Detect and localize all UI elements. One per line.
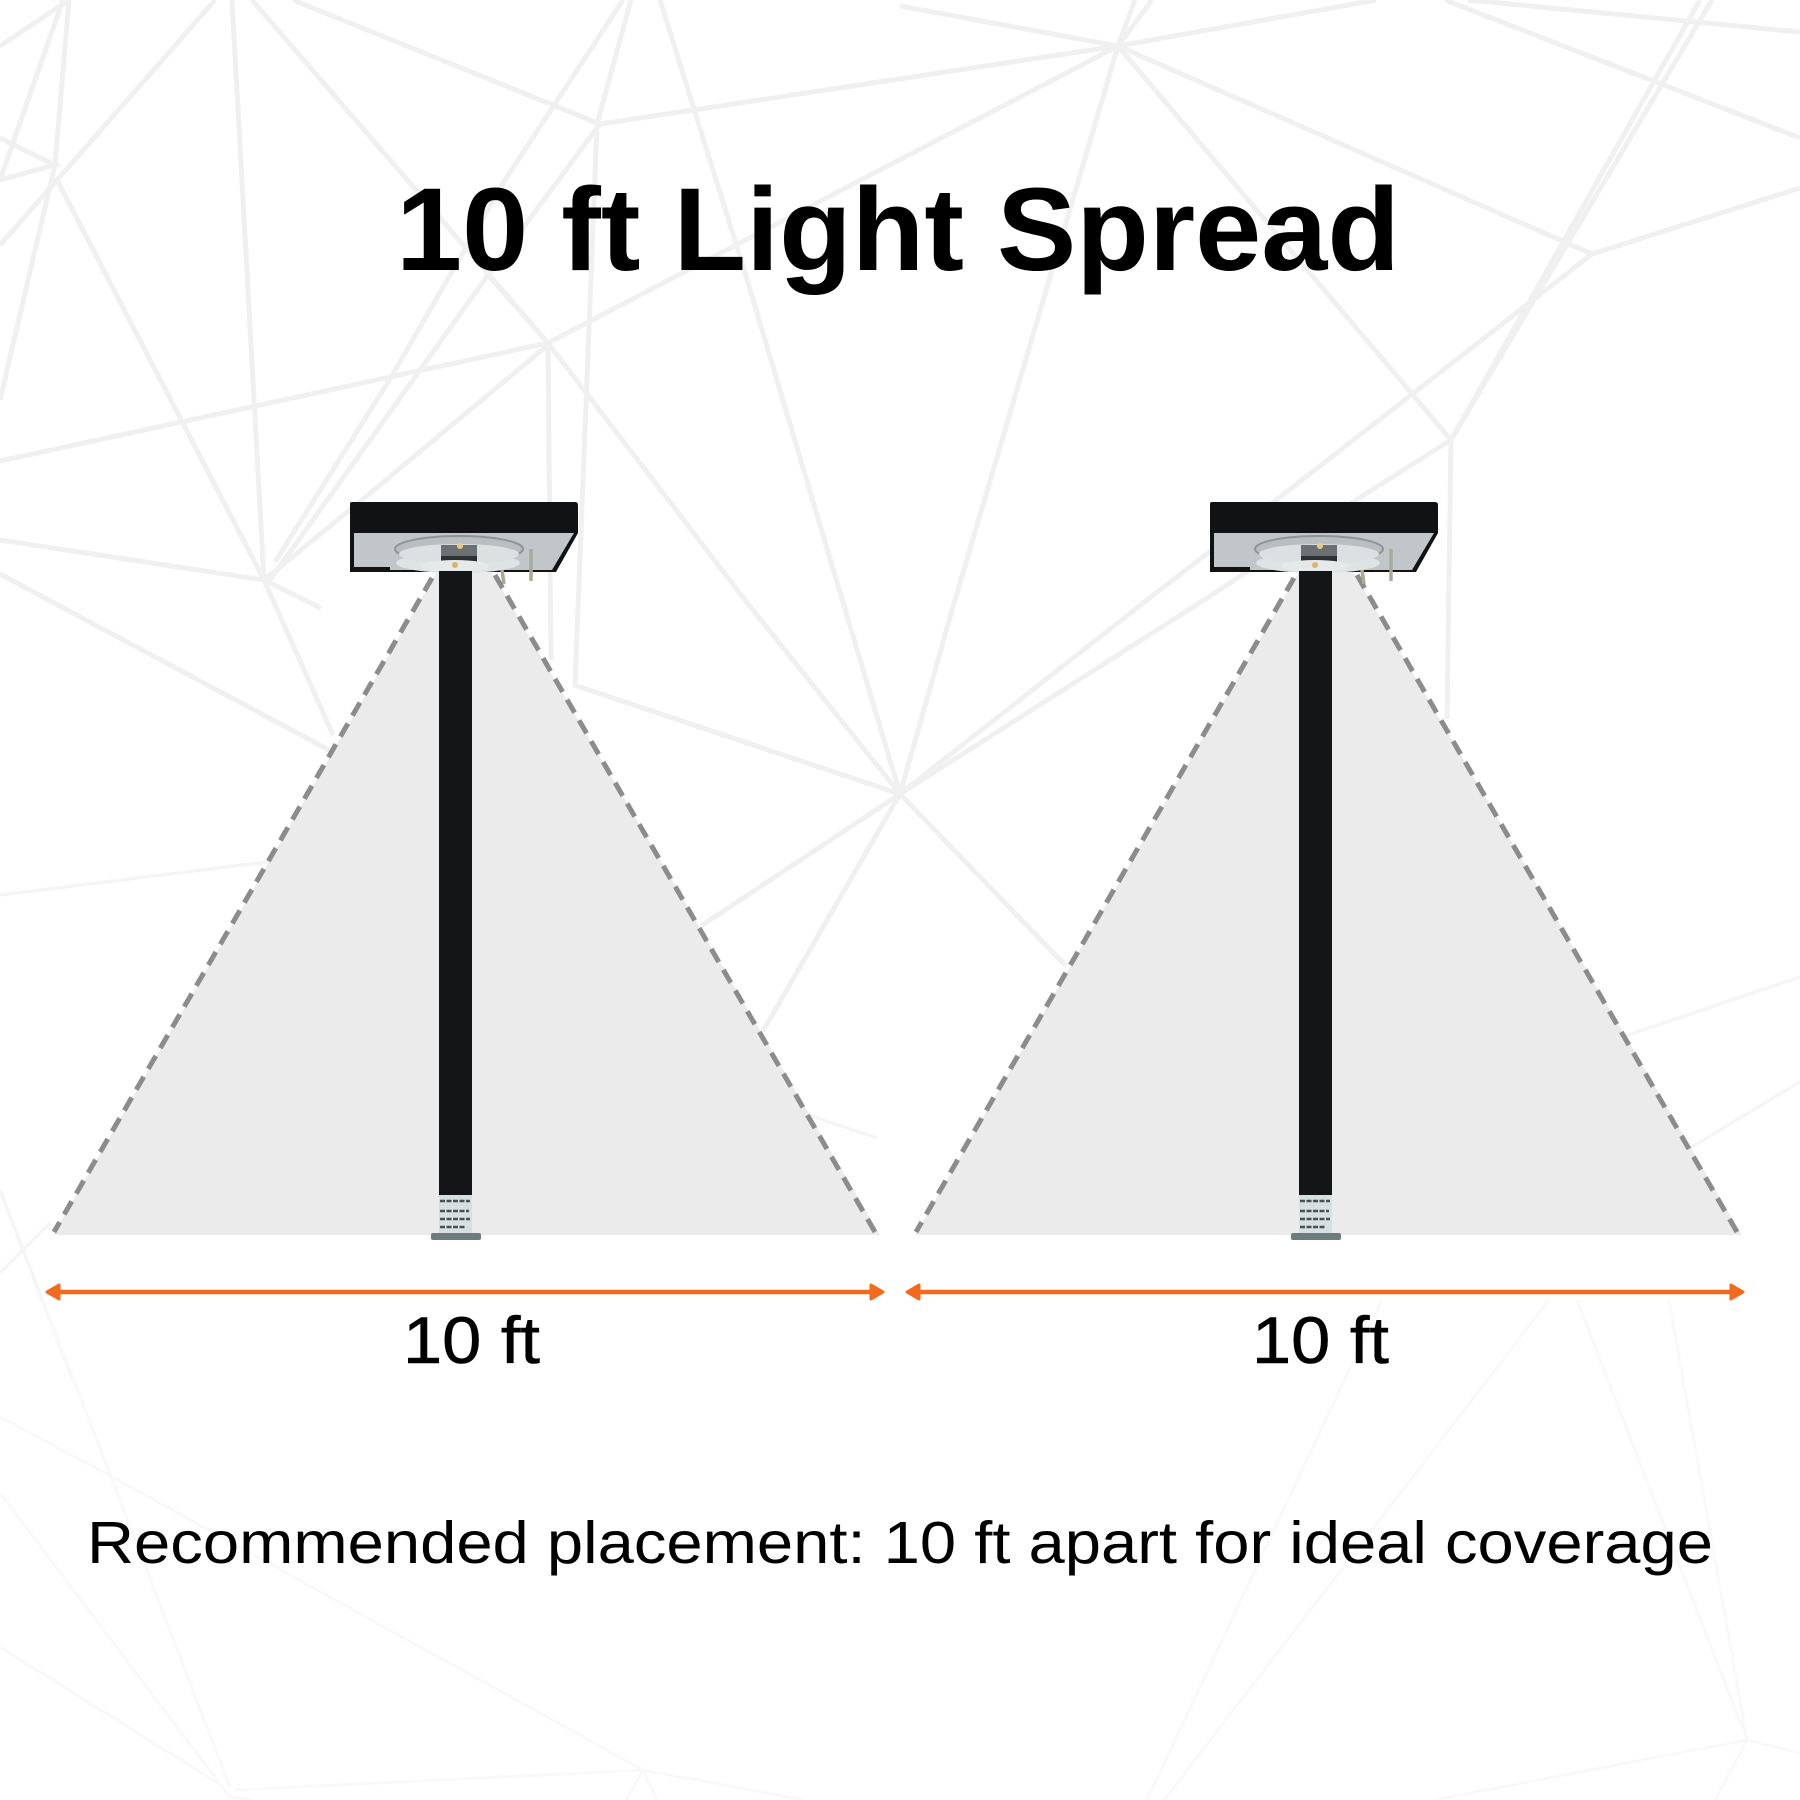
left solar light fixture xyxy=(350,502,578,1240)
right solar light fixture xyxy=(1210,502,1438,1240)
right light cone xyxy=(915,525,1742,1235)
title: 10 ft Light Spread xyxy=(396,164,1400,296)
left light cone xyxy=(53,525,880,1235)
left distance label: 10 ft xyxy=(403,1303,540,1377)
right dimension arrow xyxy=(907,1285,1743,1299)
left dimension arrow xyxy=(47,1285,883,1299)
placement caption: Recommended placement: 10 ft apart for ideal coverage xyxy=(87,1510,1713,1576)
right distance label: 10 ft xyxy=(1252,1303,1389,1377)
